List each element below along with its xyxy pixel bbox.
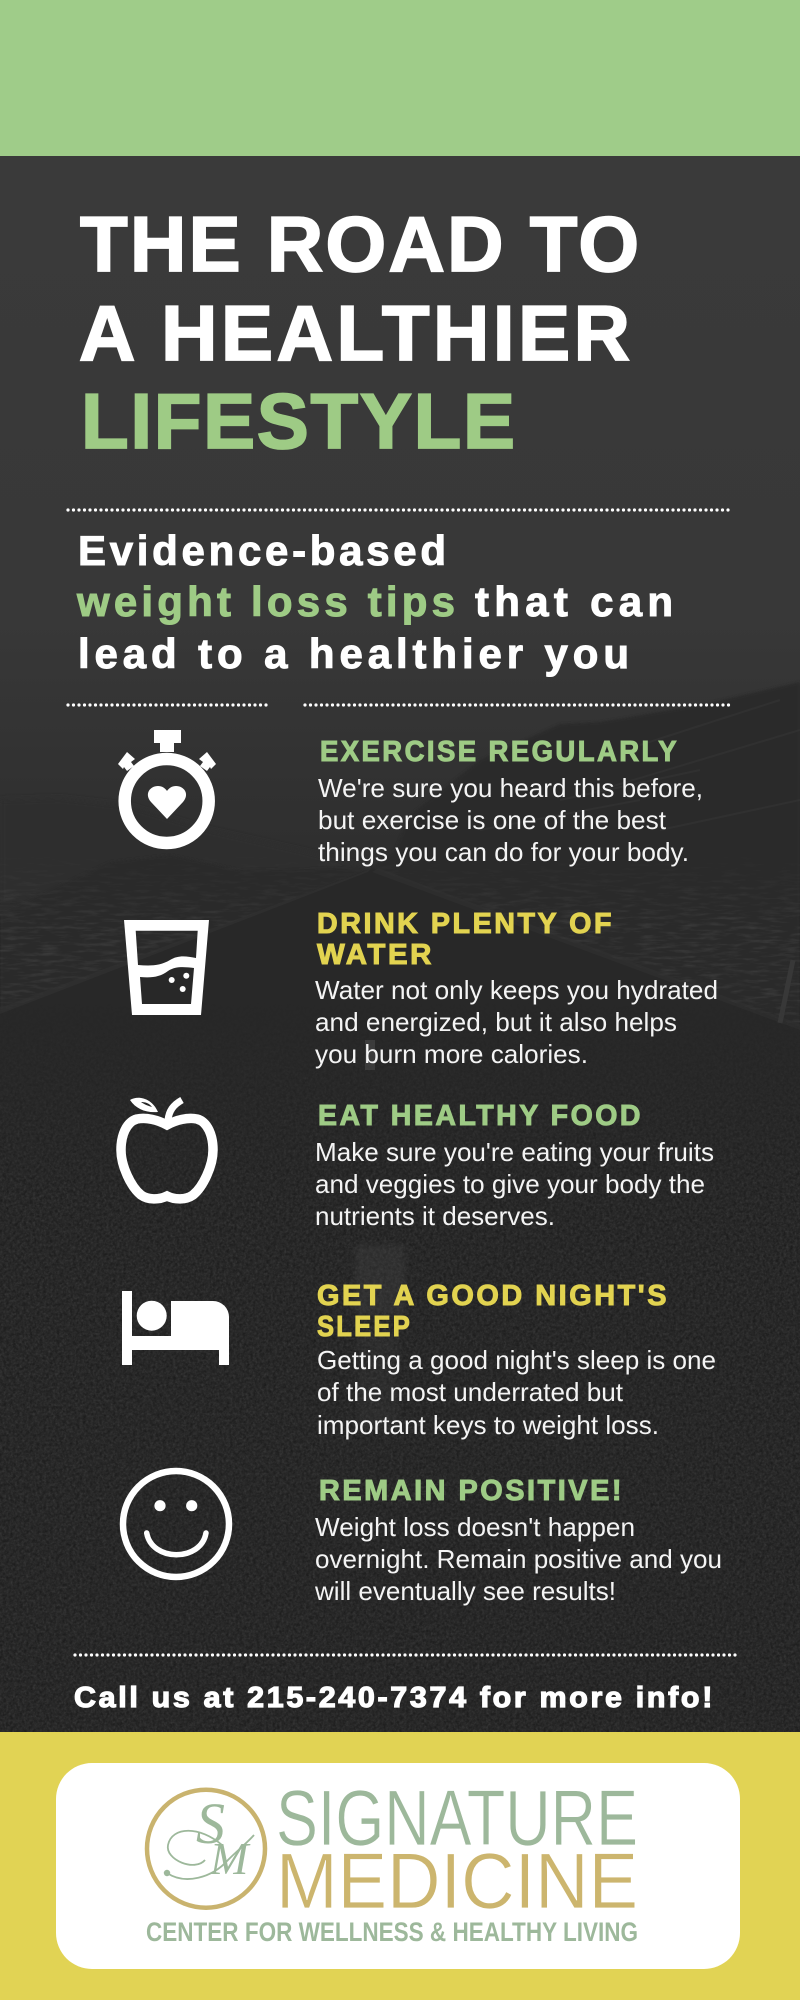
- subtitle: that can: [475, 578, 673, 625]
- tip: exercise regularly: EXERCISE REGULARLY: [320, 736, 679, 768]
- tip: drink plenty of water: and energized, but it also helps: [315, 1007, 677, 1037]
- icon: stopwatch with heart: [118, 730, 216, 843]
- tip: drink plenty of water: [315, 908, 718, 1069]
- tip: exercise regularly: We're sure you heard this before,: [318, 773, 703, 803]
- tip: get a good night's sleep: important keys to weight loss.: [317, 1410, 659, 1440]
- logo emblem: S: [196, 1791, 225, 1856]
- tip: get a good night's sleep: SLEEP: [317, 1311, 412, 1343]
- tip: get a good night's sleep: [317, 1280, 716, 1440]
- tip: remain positive: will eventually see results!: [314, 1576, 616, 1606]
- tip: drink plenty of water: WATER: [317, 939, 434, 971]
- tip: get a good night's sleep: of the most underrated but: [317, 1377, 624, 1407]
- tip: remain positive: overnight. Remain positive and you: [315, 1544, 722, 1574]
- logo emblem: M: [209, 1833, 251, 1884]
- tip: drink plenty of water: you burn more calories.: [315, 1039, 588, 1069]
- tip: drink plenty of water: DRINK PLENTY OF: [317, 908, 614, 940]
- subtitle: lead to a healthier you: [78, 630, 629, 677]
- subtitle: weight loss tips: [76, 578, 455, 625]
- title: LIFESTYLE: [81, 377, 515, 465]
- tip: exercise regularly: things you can do for your body.: [318, 837, 689, 867]
- tip: remain positive: Weight loss doesn't happen: [315, 1512, 635, 1542]
- tip: exercise regularly: but exercise is one of the best: [318, 805, 667, 835]
- logo emblem: [147, 1790, 265, 1908]
- tip: eat healthy food: [315, 1100, 714, 1231]
- tip: exercise regularly: [318, 736, 703, 867]
- tip: eat healthy food: nutrients it deserves.: [315, 1201, 555, 1231]
- tip: drink plenty of water: Water not only keeps you hydrated: [315, 975, 718, 1005]
- call to action: Call us at 215-240-7374 for more info!: [74, 1682, 715, 1714]
- title: A HEALTHIER: [79, 289, 630, 377]
- subtitle: [76, 527, 673, 677]
- title: THE ROAD TO: [80, 200, 639, 288]
- tip: eat healthy food: Make sure you're eating your fruits: [315, 1137, 714, 1167]
- logo wordmark: CENTER FOR WELLNESS & HEALTHY LIVING: [146, 1917, 638, 1947]
- icon: apple: [121, 1098, 213, 1199]
- icon: glass of water: [124, 920, 209, 1015]
- tip: get a good night's sleep: GET A GOOD NIGHT'S: [317, 1280, 669, 1312]
- title: [79, 200, 639, 465]
- tip: remain positive: REMAIN POSITIVE!: [319, 1475, 624, 1507]
- tip: remain positive: [314, 1475, 722, 1606]
- top green band: [0, 0, 800, 156]
- subtitle: Evidence-based: [78, 527, 446, 574]
- footer yellow band: [0, 1732, 800, 2000]
- icon: smiley face: [123, 1471, 229, 1577]
- panel: road photo background: [0, 682, 800, 1732]
- logo wordmark: [146, 1773, 638, 1947]
- tip: eat healthy food: and veggies to give your body the: [315, 1169, 705, 1199]
- icon: bed: [122, 1291, 229, 1365]
- tip: get a good night's sleep: Getting a good night's sleep is one: [317, 1345, 716, 1375]
- logo wordmark: MEDICINE: [276, 1836, 638, 1925]
- logo card: [56, 1763, 740, 1969]
- tip: eat healthy food: EAT HEALTHY FOOD: [318, 1100, 643, 1132]
- logo wordmark: SIGNATURE: [276, 1773, 638, 1862]
